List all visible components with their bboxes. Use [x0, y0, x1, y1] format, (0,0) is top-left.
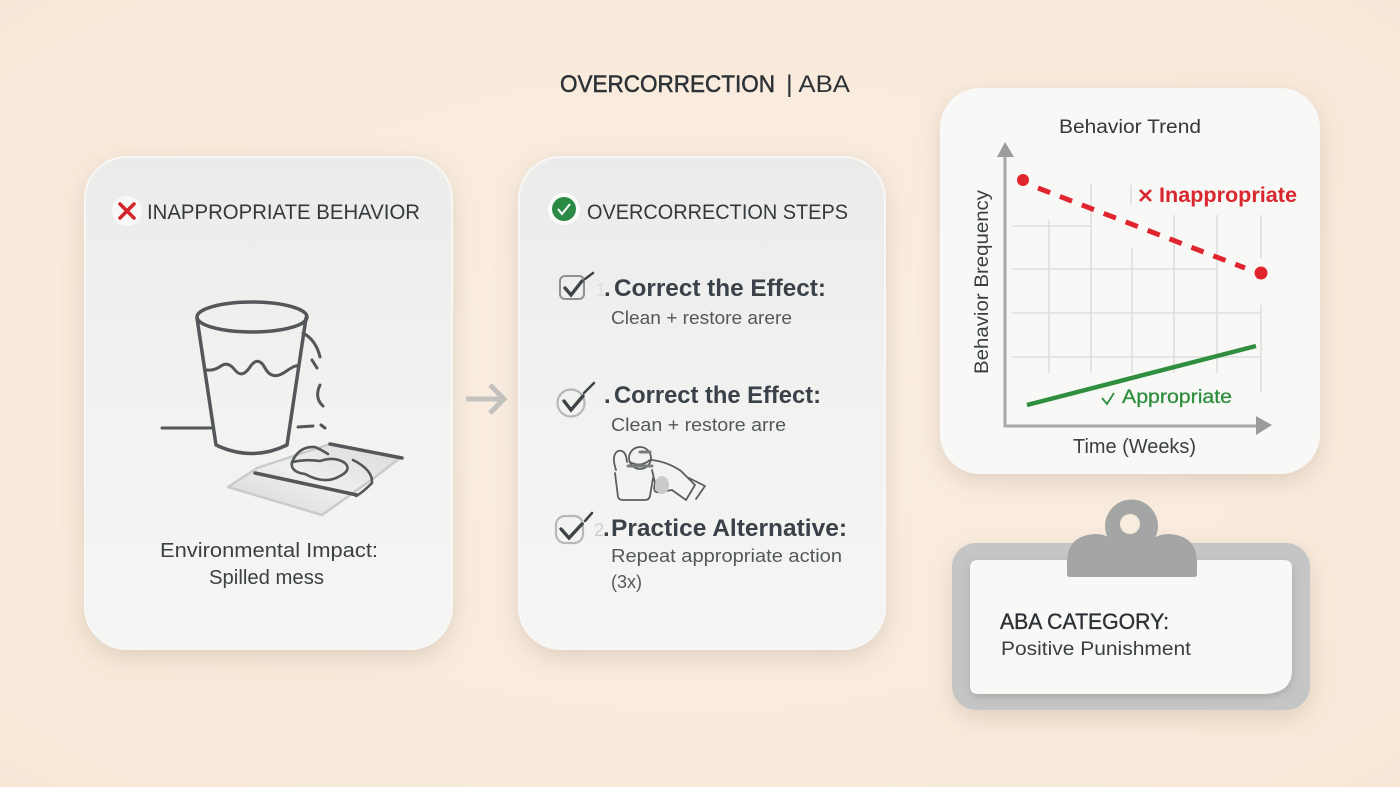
heading: overcorrection steps: OVERCORRECTION STEPS	[587, 201, 848, 224]
step 2: Correct the Effect:	[614, 382, 821, 409]
clip	[1067, 500, 1197, 577]
icon: green check	[548, 193, 580, 225]
step 1: .	[604, 275, 611, 302]
icon: spilled cup	[162, 302, 402, 515]
text: ABA category	[1000, 609, 1192, 660]
icon: checkbox 1	[560, 273, 593, 299]
series: appropriate: Appropriate	[1122, 387, 1232, 408]
caption: environmental impact: Spilled mess	[209, 567, 324, 589]
step 3: .	[603, 515, 610, 542]
panel: inappropriate behavior	[85, 157, 452, 649]
step 3: Repeat appropriate action	[611, 546, 842, 566]
caption: environmental impact	[160, 540, 378, 589]
step 3: 2	[594, 520, 604, 540]
heading: inappropriate behavior: INAPPROPRIATE BEHAVIOR	[147, 201, 420, 224]
chart title: Behavior Trend	[1059, 117, 1201, 138]
step 2	[558, 382, 821, 435]
step 1	[560, 273, 826, 328]
step 1: Clean + restore arere	[611, 308, 792, 328]
panel: ABA category clipboard	[952, 500, 1310, 710]
step 1: Correct the Effect:	[614, 275, 826, 302]
series: inappropriate	[1017, 174, 1297, 280]
caption: environmental impact: Environmental Impact:	[160, 540, 378, 562]
axis label: x: Time (Weeks)	[1073, 436, 1196, 458]
step 3: (3x)	[611, 572, 642, 592]
axis label: y: Behavior Brequency	[972, 189, 993, 374]
icon: red cross	[112, 196, 142, 226]
icon: checkbox 3	[556, 513, 592, 543]
series: inappropriate: Inappropriate	[1159, 184, 1297, 207]
arrow: to steps	[466, 385, 504, 413]
text: ABA category: ABA CATEGORY:	[1000, 609, 1169, 634]
step 2: .	[604, 382, 611, 409]
step 1: 1	[596, 280, 606, 300]
step 3: Practice Alternative:	[611, 515, 847, 542]
step 3	[556, 513, 847, 592]
text: ABA category: Positive Punishment	[1001, 639, 1192, 660]
title: | ABA	[786, 71, 850, 98]
axes	[997, 142, 1272, 435]
panel: behavior trend chart	[940, 88, 1320, 474]
icon: bucket and hand	[614, 447, 705, 500]
title: OVERCORRECTION	[560, 71, 775, 98]
icon: checkbox 2	[558, 383, 594, 416]
step 2: Clean + restore arre	[611, 415, 786, 435]
paper	[970, 560, 1292, 694]
series: appropriate	[1027, 346, 1256, 408]
panel: overcorrection steps	[519, 157, 885, 649]
